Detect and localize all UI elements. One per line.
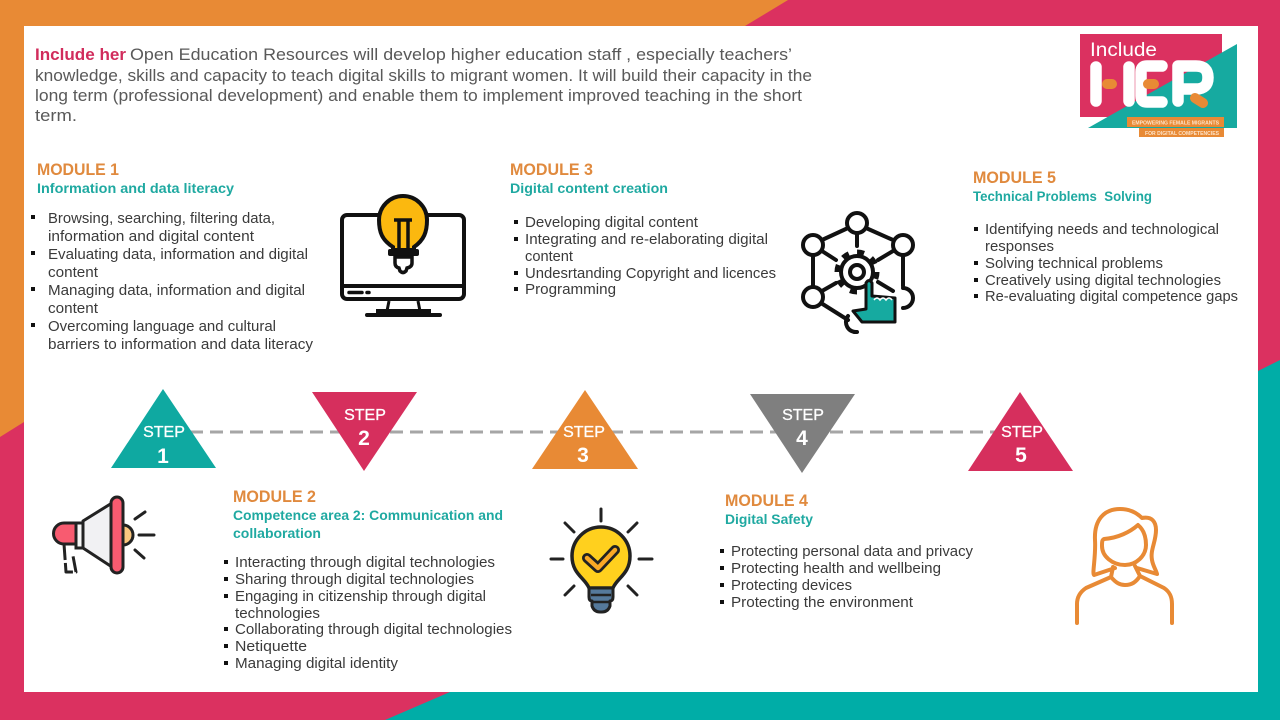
module 4 bullet list: [720, 543, 973, 611]
logo: Include HER: EMPOWERING FEMALE MIGRANTS: [1132, 120, 1220, 126]
module 5 subtitle: Technical Problems Solving: [973, 189, 1152, 204]
module 3 subtitle: Digital content creation: [510, 181, 668, 196]
panel: module 5: [973, 169, 1238, 305]
panel: module 1: [31, 161, 313, 353]
module 5 bullet list: Solving technical problems: [985, 255, 1163, 272]
module 5 bullet list: Re-evaluating digital competence gaps: [985, 288, 1238, 305]
module 1 bullet list: information and digital content: [48, 228, 255, 245]
module 3 bullet list: [514, 214, 776, 298]
module 4 heading: MODULE 4: [725, 492, 809, 510]
module 2 bullet list: Sharing through digital technologies: [235, 571, 474, 588]
module 4 bullet list: Protecting the environment: [731, 594, 914, 611]
step 4 marker: STEP: [782, 407, 824, 424]
module 4 bullet list: Protecting devices: [731, 577, 852, 594]
module 2 heading: MODULE 2: [233, 488, 316, 506]
panel: module 2: [224, 488, 512, 672]
icon: monitor with light bulb: [342, 196, 464, 317]
module 1 bullet list: Evaluating data, information and digital: [48, 246, 308, 263]
module 2 bullet list: technologies: [235, 605, 320, 622]
step 5 marker: [968, 392, 1073, 471]
panel: module 2: collaboration: [233, 526, 321, 541]
module 3 heading: MODULE 3: [510, 161, 593, 179]
module 1 bullet list: Overcoming language and cultural: [48, 318, 276, 335]
module 2 subtitle: Competence area 2: Communication and: [233, 508, 503, 523]
module 2 bullet list: Engaging in citizenship through digital: [235, 588, 486, 605]
module 3 bullet list: content: [525, 248, 574, 265]
panel: module 3: [510, 161, 776, 298]
module 2 bullet list: Netiquette: [235, 638, 307, 655]
icon: megaphone: [54, 497, 154, 573]
module 2 bullet list: Collaborating through digital technologies: [235, 621, 512, 638]
intro text: long term (professional development) and enable them to implement improved teaching in the short: [35, 87, 802, 105]
module 1 bullet list: Browsing, searching, filtering data,: [48, 210, 275, 227]
panel: module 4: [720, 492, 973, 611]
module 1 bullet list: content: [48, 300, 99, 317]
module 1 heading: MODULE 1: [37, 161, 119, 179]
step 3 marker: [532, 390, 638, 469]
step 3 marker: 3: [577, 444, 589, 467]
intro text: knowledge, skills and capacity to teach digital skills to migrant women. It will build their capacity in the: [35, 67, 812, 85]
logo: Include HER: Include: [1090, 40, 1157, 61]
step 1 marker: STEP: [143, 424, 185, 441]
module 5 heading: MODULE 5: [973, 169, 1056, 187]
step 4 marker: [750, 394, 855, 473]
step 5 marker: 5: [1015, 444, 1027, 467]
step 1 marker: [111, 389, 216, 468]
step 1 marker: 1: [157, 445, 169, 468]
intro text: [35, 46, 812, 125]
module 3 bullet list: Programming: [525, 281, 616, 298]
logo: Include HER: [1080, 34, 1237, 137]
logo: Include HER: FOR DIGITAL COMPETENCIES: [1145, 131, 1220, 137]
module 3 bullet list: Developing digital content: [525, 214, 699, 231]
module 4 bullet list: Protecting health and wellbeing: [731, 560, 941, 577]
module 1 bullet list: barriers to information and data literacy: [48, 336, 313, 353]
step 2 marker: [312, 392, 417, 471]
module 1 bullet list: content: [48, 264, 99, 281]
step 2 marker: STEP: [344, 407, 386, 424]
intro text: Include her: [35, 46, 127, 64]
module 4 bullet list: Protecting personal data and privacy: [731, 543, 973, 560]
module 2 bullet list: Interacting through digital technologies: [235, 554, 495, 571]
module 5 bullet list: [974, 221, 1238, 305]
module 5 bullet list: responses: [985, 238, 1054, 255]
module 1 bullet list: [31, 210, 313, 353]
module 3 bullet list: Undesrtanding Copyright and licences: [525, 265, 776, 282]
step 5 marker: STEP: [1001, 424, 1043, 441]
step 4 marker: 4: [796, 427, 808, 450]
icon: light bulb with check: [551, 509, 652, 612]
step 3 marker: STEP: [563, 424, 605, 441]
intro text: Open Education Resources will develop higher education staff , especially teachers’: [130, 46, 792, 64]
module 5 bullet list: Creatively using digital technologies: [985, 272, 1221, 289]
module 1 subtitle: Information and data literacy: [37, 181, 235, 196]
icon: network with gear and hand: [803, 213, 913, 332]
timeline dashed line: [190, 430, 1005, 434]
module 1 bullet list: Managing data, information and digital: [48, 282, 305, 299]
icon: woman outline: [1077, 509, 1172, 623]
step 2 marker: 2: [358, 427, 370, 450]
module 4 subtitle: Digital Safety: [725, 512, 813, 527]
module 2 bullet list: [224, 554, 512, 672]
module 2 bullet list: Managing digital identity: [235, 655, 399, 672]
intro text: term.: [35, 107, 77, 125]
module 3 bullet list: Integrating and re-elaborating digital: [525, 231, 768, 248]
module 5 bullet list: Identifying needs and technological: [985, 221, 1219, 238]
